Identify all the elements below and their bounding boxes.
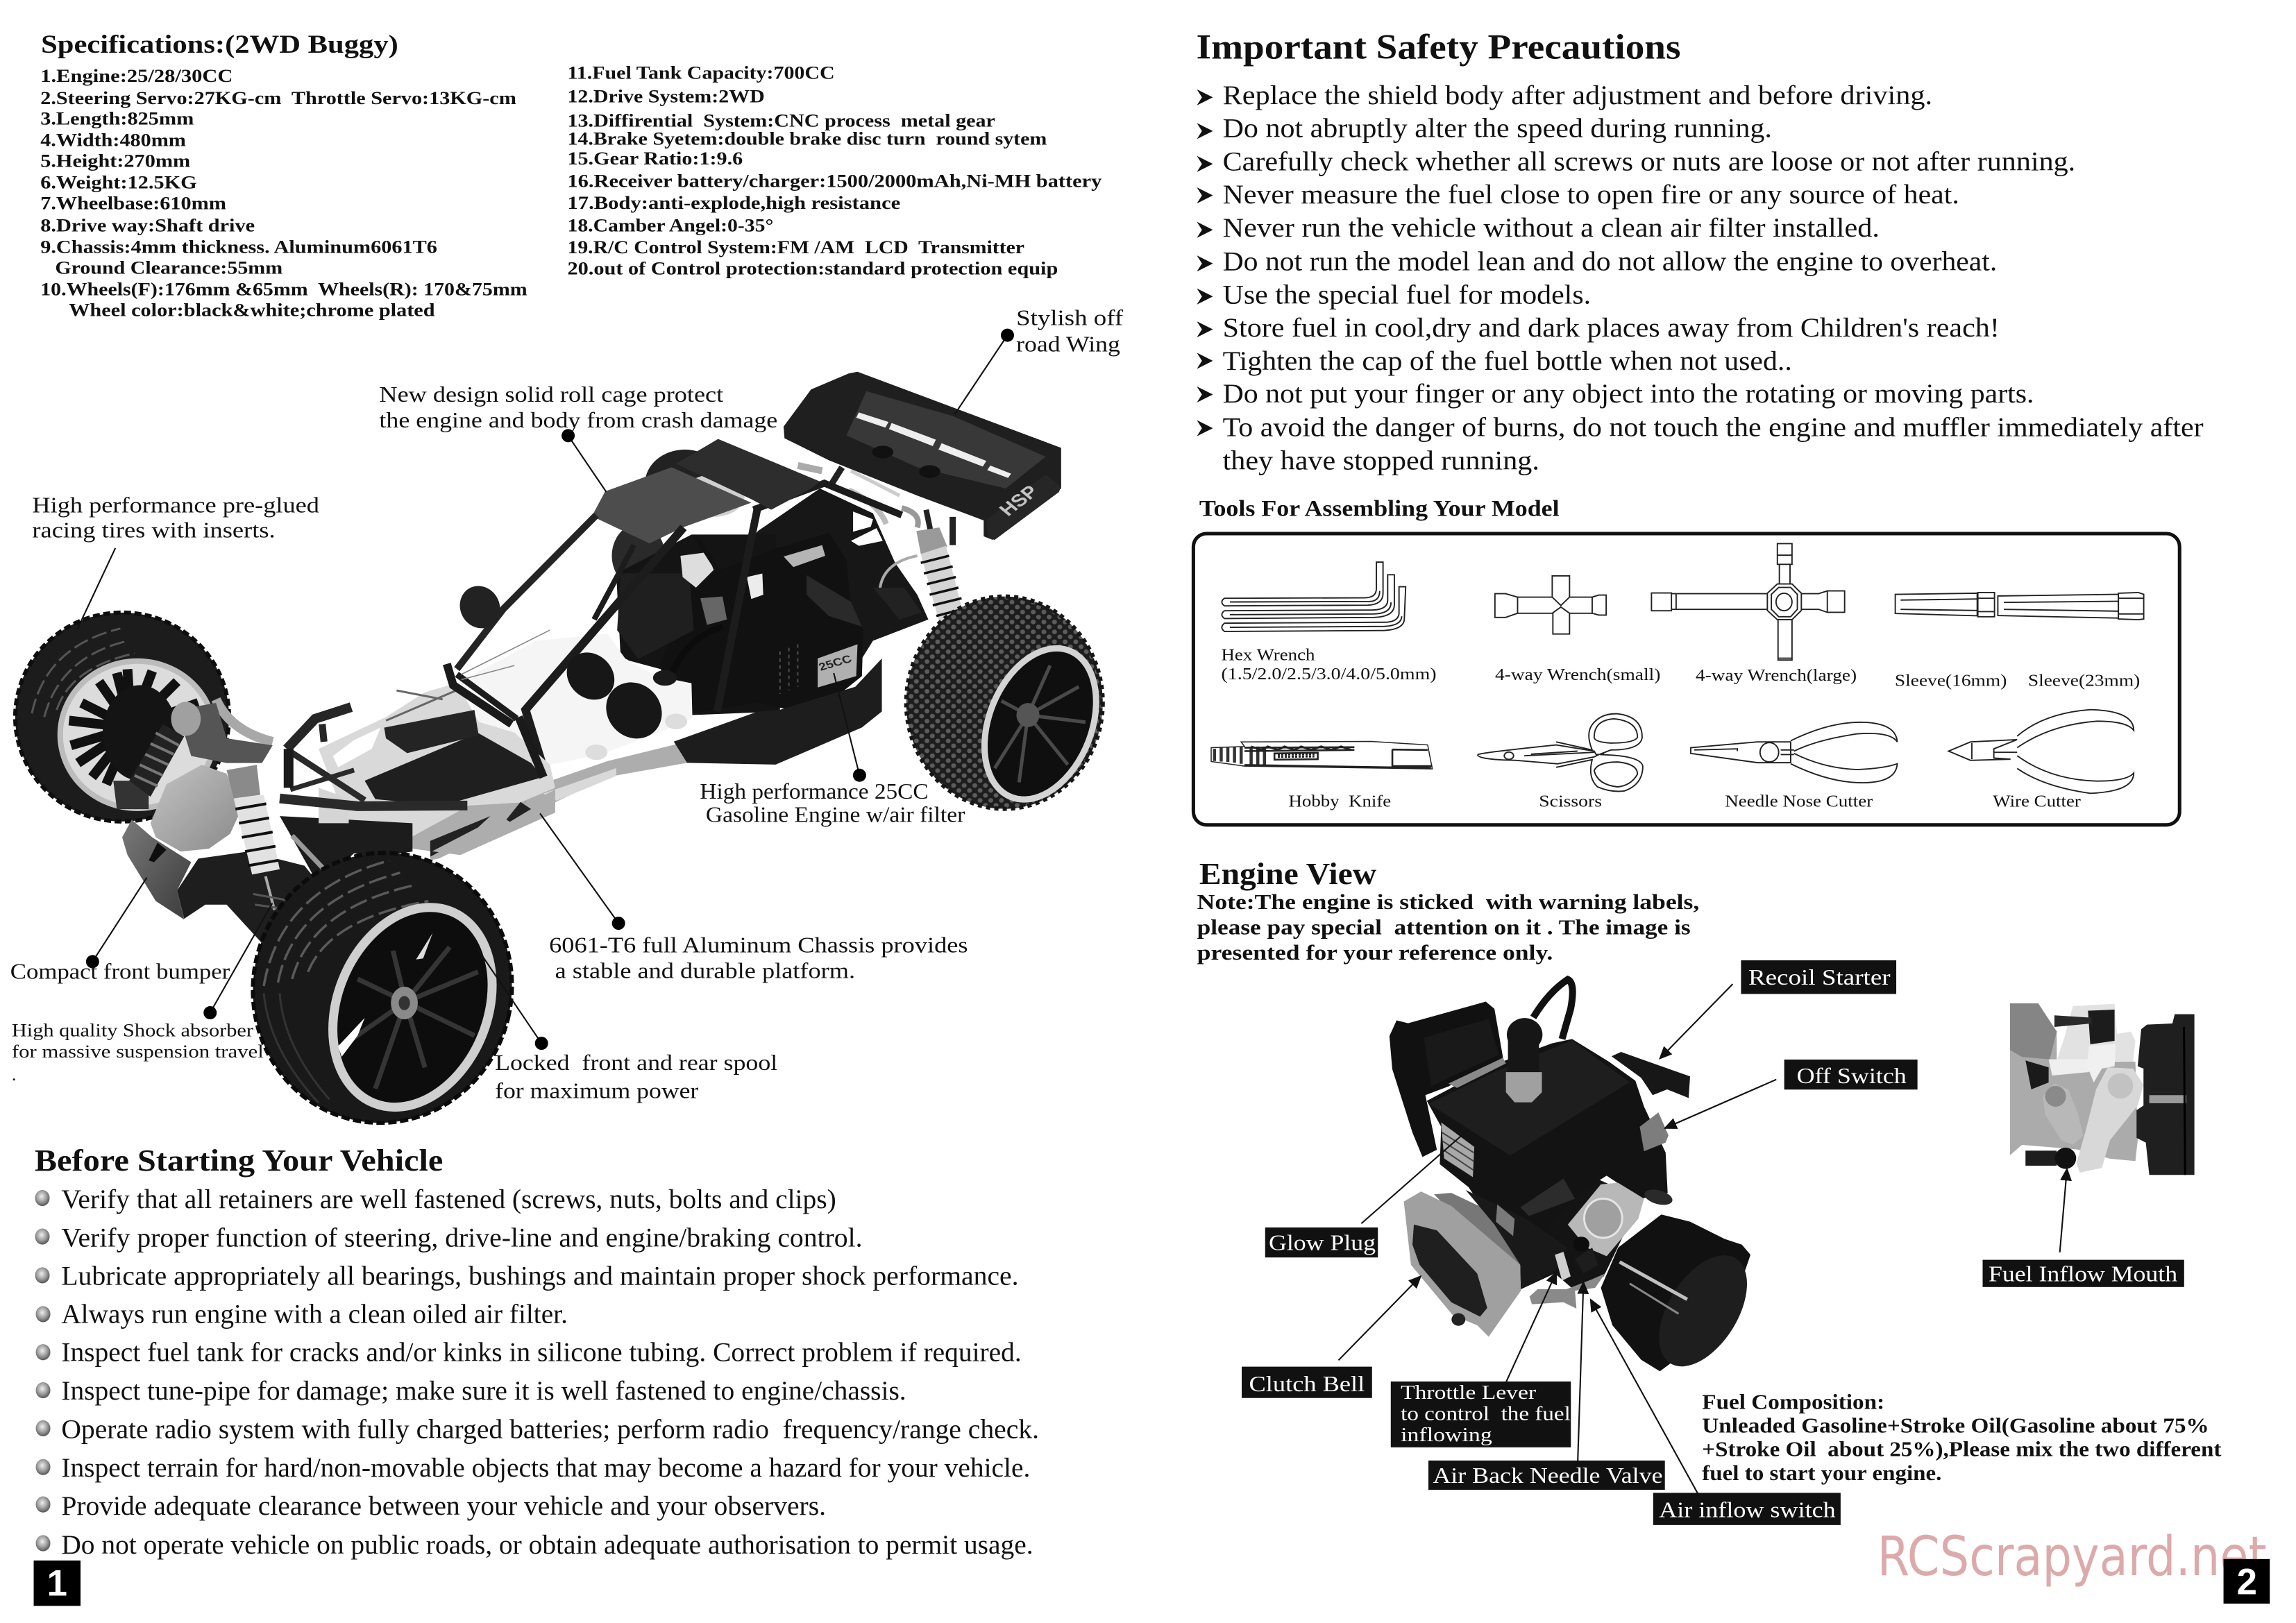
wing: HSP	[995, 482, 1043, 520]
callout: spool	[495, 1051, 777, 1103]
specification list, column 2: 13.Diffirential System:CNC process metal gear	[567, 110, 995, 131]
safety list: Replace the shield body after adjustment and before driving.	[1223, 80, 1932, 110]
callout: roll cage: New design solid roll cage protect	[379, 382, 723, 407]
roll cage tubes	[457, 507, 758, 781]
wing	[784, 372, 1061, 540]
tool labels: Scissors	[1539, 792, 1602, 810]
label: off switch: Off Switch	[1797, 1064, 1907, 1088]
specification list, column 1: 4.Width:480mm	[40, 129, 186, 150]
spark plug	[1506, 1018, 1542, 1103]
tool labels: Wire Cutter	[1993, 792, 2081, 810]
checklist: before starting: Inspect tune-pipe for damage; make sure it is well fastened to engine/chassis.	[61, 1376, 906, 1406]
specification list, column 1: 3.Length:825mm	[40, 108, 194, 128]
callout: shock absorber	[12, 1021, 264, 1085]
chassis deck	[319, 683, 555, 855]
buggy photo illustration	[15, 372, 1115, 1147]
engine note: please pay special attention on it . The image is	[1197, 916, 1691, 940]
specification list, column 1: 8.Drive way:Shaft drive	[40, 214, 255, 235]
label: air back needle valve: Air Back Needle Valve	[1433, 1463, 1663, 1488]
checklist: before starting: Inspect fuel tank for cracks and/or kinks in silicone tubing. Correct problem if required.	[61, 1337, 1022, 1367]
checklist: before starting: Inspect terrain for hard/non-movable objects that may become a hazard for your vehicle.	[61, 1453, 1030, 1483]
rear deck and roof	[592, 439, 820, 543]
safety list: To avoid the danger of burns, do not touch the engine and muffler immediately after	[1223, 413, 2204, 443]
tool labels: Hex Wrench	[1221, 645, 1315, 664]
page number 2	[2224, 1559, 2270, 1604]
engine leader arrows	[1338, 984, 2067, 1493]
safety list: Never measure the fuel close to open fire or any source of heat.	[1223, 180, 1959, 210]
checklist: before starting: Do not operate vehicle on public roads, or obtain adequate authorisation to permit usage.	[61, 1530, 1033, 1560]
specification list, column 2: 17.Body:anti-explode,high resistance	[567, 192, 901, 213]
icon: hex wrench	[1222, 562, 1406, 631]
rear half of buggy: wing, frame, engine, tank	[430, 372, 1115, 860]
label: air inflow switch: Air inflow switch	[1659, 1497, 1836, 1522]
checklist: before starting	[35, 1184, 1039, 1560]
underside	[177, 851, 319, 947]
tool labels: Sleeve(16mm)	[1895, 671, 2007, 690]
specification list, column 2	[567, 62, 1101, 279]
page number 1	[34, 1561, 81, 1606]
rear frame	[732, 466, 953, 662]
nose body	[151, 765, 242, 851]
mirror and fuel caps	[457, 584, 687, 760]
safety list: Tighten the cap of the fuel bottle when not used..	[1223, 346, 1792, 376]
callout: spool: for maximum power	[495, 1078, 699, 1103]
air filter	[2136, 1014, 2195, 1175]
specification list, column 2: 11.Fuel Tank Capacity:700CC	[567, 62, 835, 83]
specification list, column 1: 9.Chassis:4mm thickness. Aluminum6061T6	[40, 237, 437, 257]
recoil handle	[1612, 1052, 1690, 1098]
label: glow plug: Glow Plug	[1269, 1231, 1376, 1255]
callout: wing: Stylish off	[1016, 305, 1124, 330]
tool labels: Sleeve(23mm)	[2028, 671, 2140, 690]
engine note: Note:The engine is sticked with warning labels,	[1197, 890, 1699, 914]
callout: chassis	[549, 933, 968, 983]
carburettor body	[2010, 1003, 2138, 1161]
label: throttle lever: to control the fuel	[1401, 1403, 1571, 1425]
front suspension arm	[171, 699, 273, 763]
specification list, column 1: 10.Wheels(F):176mm &65mm Wheels(R): 170&75mm	[40, 279, 527, 300]
air box	[1390, 1002, 1503, 1157]
tool drawings	[1211, 543, 2144, 793]
heading: tools: Tools For Assembling Your Model	[1199, 497, 1560, 522]
callout: chassis: a stable and durable platform.	[555, 958, 855, 983]
rear shock	[916, 527, 964, 623]
specification list, column 2: 18.Camber Angel:0-35°	[567, 214, 773, 235]
label: air inflow switch	[1653, 1493, 1841, 1525]
icon: large 4-way wrench	[1651, 543, 1845, 660]
rear skid plate	[674, 658, 882, 765]
clutch housing	[1404, 1191, 1521, 1336]
label: throttle lever: inflowing	[1401, 1425, 1492, 1446]
engine note	[1197, 890, 1699, 965]
carburetor	[1568, 1183, 1674, 1273]
label: clutch bell	[1242, 1367, 1372, 1398]
panel: tools	[1193, 534, 2179, 825]
off switch	[1639, 1112, 1669, 1151]
specification list, column 2: 20.out of Control protection:standard protection equip	[567, 258, 1058, 279]
callout: roll cage: the engine and body from crash damage	[379, 408, 777, 432]
carbon brace	[280, 664, 543, 806]
callout: tires: High performance pre-glued	[32, 493, 319, 517]
fuel composition note: Unleaded Gasoline+Stroke Oil(Gasoline about 75%	[1702, 1414, 2209, 1438]
safety list: Carefully check whether all screws or nuts are loose or not after running.	[1223, 146, 2075, 176]
chassis rail	[430, 742, 687, 860]
engine photo illustration	[1390, 980, 1765, 1382]
spark wire loop	[1533, 980, 1573, 1039]
specification list, column 2: 19.R/C Control System:FM /AM LCD Transmitter	[567, 237, 1024, 257]
callout: bumper: Compact front bumper	[10, 959, 230, 983]
carburettor close-up photo	[2010, 1003, 2195, 1175]
icon: sleeves	[1896, 593, 2144, 620]
safety list: Do not put your finger or any object into the rotating or moving parts.	[1223, 379, 2034, 409]
front half of buggy: brace, bumper, shocks, wheels	[15, 613, 555, 1147]
page number 1: 1	[47, 1563, 67, 1604]
callout: wing	[1016, 305, 1124, 356]
hose nipple	[2054, 1015, 2091, 1027]
throttle lever	[1530, 1252, 1605, 1309]
checklist: before starting: Lubricate appropriately all bearings, bushings and maintain proper shock performance.	[61, 1261, 1019, 1291]
heading: specifications: Specifications:(2WD Buggy)	[41, 30, 398, 59]
fuel composition note: +Stroke Oil about 25%),Please mix the two different	[1702, 1437, 2222, 1461]
engine: 25CC	[817, 652, 854, 673]
safety list	[1197, 80, 2204, 475]
fuel composition note: fuel to start your engine.	[1702, 1461, 1941, 1485]
tool labels: Hobby Knife	[1289, 792, 1391, 810]
callout: tires: racing tires with inserts.	[32, 518, 276, 542]
checklist: before starting: Operate radio system with fully charged batteries; perform radio frequency/range check.	[61, 1414, 1039, 1444]
tool labels: 4-way Wrench(small)	[1495, 665, 1660, 684]
icon: hobby knife	[1211, 742, 1433, 769]
icon: needle nose cutter	[1691, 722, 1898, 783]
rear wheel	[906, 597, 1115, 809]
page number 2: 2	[2237, 1561, 2257, 1602]
specification list, column 1: Ground Clearance:55mm	[55, 257, 282, 278]
safety list: they have stopped running.	[1223, 445, 1539, 475]
callout: chassis: 6061-T6 full Aluminum Chassis provides	[549, 933, 968, 957]
black elbow	[2088, 1010, 2115, 1044]
specification list, column 1: 1.Engine:25/28/30CC	[40, 65, 233, 86]
callout: engine	[700, 779, 965, 827]
clear top	[2057, 1004, 2136, 1062]
label: glow plug	[1265, 1227, 1378, 1257]
coil shock behind nose	[129, 724, 184, 797]
specification list, column 2: 12.Drive System:2WD	[567, 86, 765, 107]
fuel tank	[457, 634, 693, 765]
tool labels: (1.5/2.0/2.5/3.0/4.0/5.0mm)	[1221, 665, 1437, 683]
engine note: presented for your reference only.	[1197, 941, 1553, 965]
callout: wing: road Wing	[1016, 332, 1120, 356]
fuel composition note	[1702, 1390, 2222, 1485]
white stem	[2087, 1044, 2116, 1082]
callout: roll cage	[379, 382, 777, 432]
specification list, column 2: 14.Brake Syetem:double brake disc turn round sytem	[567, 128, 1047, 148]
safety list: Do not abruptly alter the speed during running.	[1223, 113, 1772, 143]
specification list, column 1: Wheel color:black&white;chrome plated	[69, 300, 435, 321]
engine	[616, 533, 863, 715]
callout: shock absorber: .	[12, 1064, 16, 1085]
icon: wire cutter	[1948, 710, 2134, 793]
translucent tube	[2077, 1067, 2143, 1173]
checklist: before starting: Verify proper function of steering, drive-line and engine/braking control.	[61, 1223, 863, 1252]
specification list, column 2: 15.Gear Ratio:1:9.6	[567, 148, 743, 169]
heading: before starting: Before Starting Your Vehicle	[35, 1144, 443, 1178]
specification list, column 2: 16.Receiver battery/charger:1500/2000mAh,Ni-MH battery	[567, 171, 1101, 192]
crankcase	[1466, 1178, 1575, 1289]
far side wheels	[612, 450, 745, 588]
specification list, column 1: 6.Weight:12.5KG	[40, 172, 197, 193]
safety list: Do not run the model lean and do not allow the engine to overheat.	[1223, 246, 1997, 276]
main front wheel	[228, 829, 537, 1147]
air filter	[1601, 1214, 1765, 1382]
lever tab	[2043, 1084, 2084, 1145]
callout: shock absorber: for massive suspension travel	[12, 1042, 264, 1062]
tool labels: Needle Nose Cutter	[1725, 792, 1873, 810]
fuel composition note: Fuel Composition:	[1702, 1390, 1884, 1413]
specification list, column 1: 7.Wheelbase:610mm	[40, 193, 226, 214]
specification list, column 1: 2.Steering Servo:27KG-cm Throttle Servo:13KG-cm	[40, 87, 516, 108]
label: throttle lever: Throttle Lever	[1401, 1382, 1537, 1404]
callout: spool: Locked front and rear spool	[495, 1051, 777, 1075]
specification list, column 1	[40, 65, 527, 321]
heading: safety precautions: Important Safety Precautions	[1197, 27, 1681, 66]
label: recoil starter: Recoil Starter	[1748, 965, 1891, 989]
label: clutch bell: Clutch Bell	[1249, 1372, 1365, 1396]
safety list: Never run the vehicle without a clean air filter installed.	[1223, 213, 1880, 243]
icon: scissors	[1478, 714, 1643, 791]
label: off switch	[1784, 1060, 1918, 1089]
label: fuel inflow mouth: Fuel Inflow Mouth	[1989, 1262, 2177, 1286]
callout: shock absorber: High quality Shock absorber	[12, 1021, 253, 1041]
icon: small 4-way wrench	[1495, 576, 1606, 634]
white cap	[2049, 1060, 2089, 1076]
safety list: Use the special fuel for models.	[1223, 280, 1591, 309]
callout: engine: Gasoline Engine w/air filter	[706, 803, 965, 827]
dark bolt	[2025, 1060, 2049, 1089]
safety list: Store fuel in cool,dry and dark places away from Children's reach!	[1223, 313, 2000, 343]
tool labels	[1221, 645, 2140, 810]
checklist: before starting: Verify that all retainers are well fastened (screws, nuts, bolts and clips)	[61, 1184, 836, 1214]
lower frame	[280, 788, 412, 885]
label: recoil starter	[1741, 960, 1896, 994]
fuel inlet	[2025, 1148, 2076, 1169]
callout: engine: High performance 25CC	[700, 779, 929, 804]
left front wheel	[15, 613, 229, 822]
label: throttle lever	[1391, 1382, 1571, 1447]
engine body	[1427, 1039, 1668, 1291]
tool labels: 4-way Wrench(large)	[1696, 666, 1857, 685]
front bumper	[122, 819, 191, 919]
specification list, column 1: 5.Height:270mm	[40, 151, 190, 171]
callout: tires	[32, 493, 319, 542]
front coil-over shock	[226, 765, 292, 910]
checklist: before starting: Always run engine with a clean oiled air filter.	[61, 1299, 568, 1329]
checklist: before starting: Provide adequate clearance between your vehicle and your observers.	[61, 1491, 826, 1521]
heading: engine view: Engine View	[1199, 857, 1376, 891]
leader lines and dots for buggy callouts	[77, 329, 1014, 1050]
radio box	[364, 689, 543, 806]
